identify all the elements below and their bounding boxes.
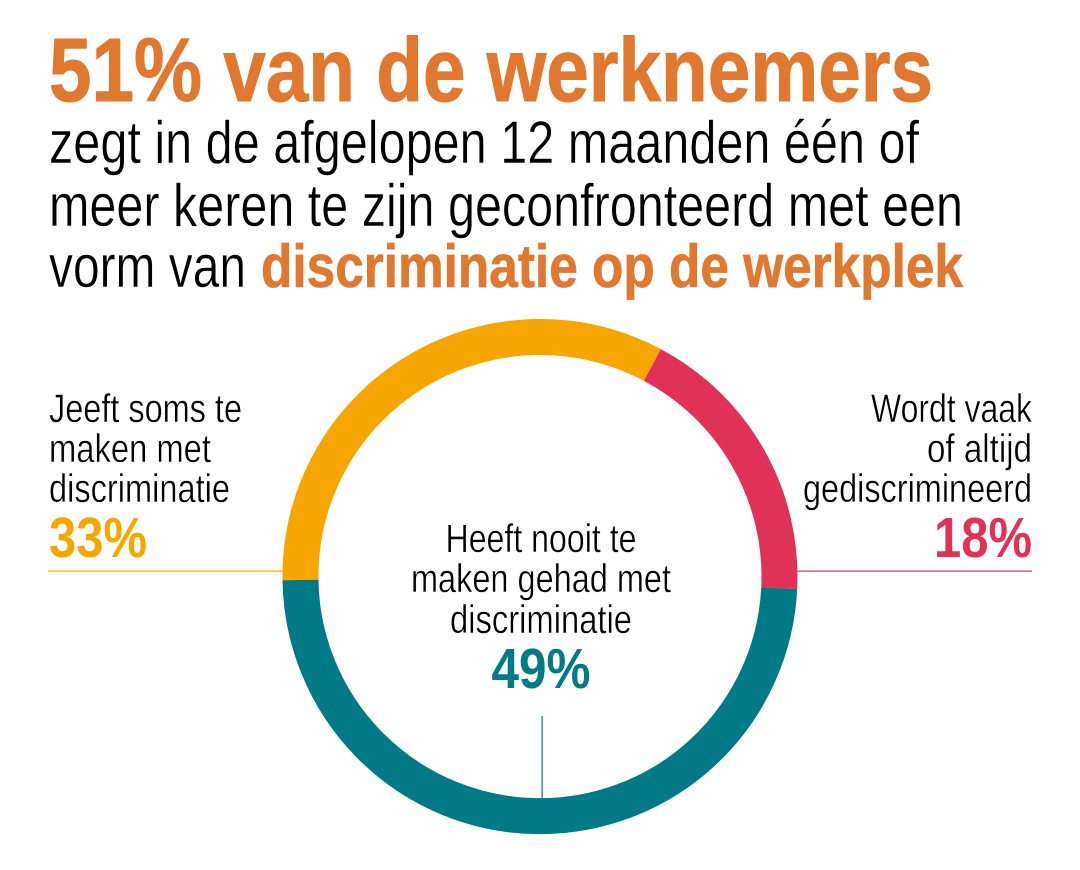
- left label: sometimes: 33%: [49, 506, 147, 570]
- right label: often or always: [797, 387, 1033, 572]
- right label: often or always: 18%: [934, 506, 1032, 570]
- right label: often or always: of altijd: [927, 427, 1032, 471]
- left label: sometimes: [48, 387, 284, 572]
- title: 51% van de werknemers: [49, 21, 933, 121]
- right label: often or always: gediscrimineerd: [803, 467, 1032, 511]
- left label: sometimes: Jeeft soms te: [49, 387, 242, 431]
- title: [49, 21, 964, 300]
- subtitle text: vorm van: [49, 233, 246, 300]
- left label: sometimes: discriminatie: [49, 467, 230, 511]
- segment: red 18%: [652, 365, 779, 588]
- left label: sometimes: maken met: [49, 427, 211, 471]
- center label: never: discriminatie: [450, 598, 632, 642]
- subtitle text: discriminatie op de werkplek: [261, 233, 964, 300]
- center label: never: 49%: [492, 637, 590, 701]
- center label: never: maken gehad met: [411, 557, 671, 601]
- center label: never: Heeft nooit te: [446, 517, 636, 561]
- subtitle text: [49, 109, 964, 300]
- donut chart: [300, 337, 779, 816]
- segment: teal 49%: [300, 580, 779, 816]
- segment: orange 33%: [300, 337, 652, 580]
- center label: never: [411, 517, 671, 800]
- right label: often or always: Wordt vaak: [871, 387, 1033, 431]
